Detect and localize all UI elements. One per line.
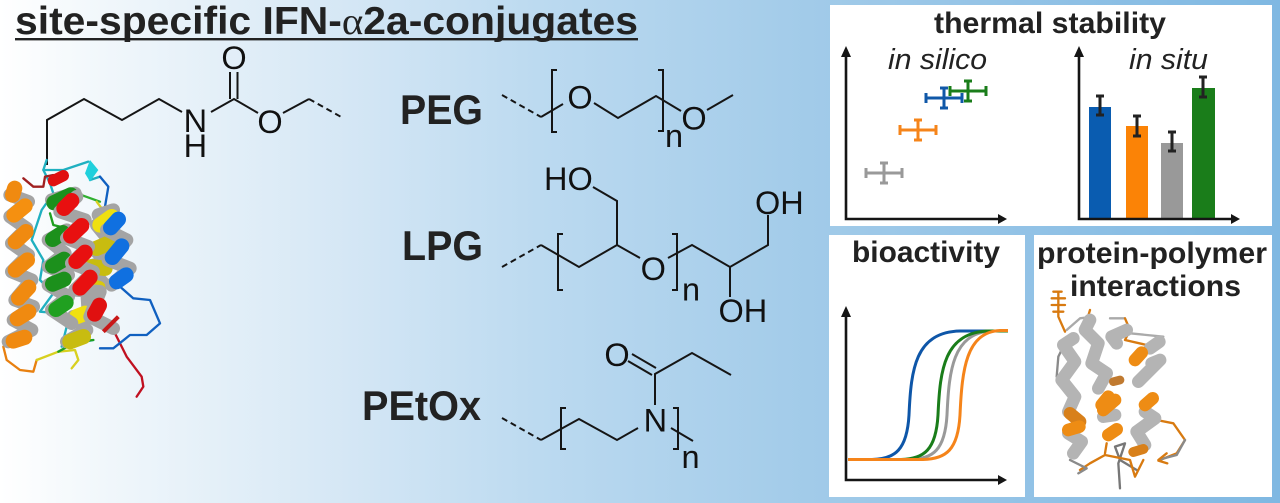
structure: LPG — [502, 161, 804, 329]
structure: LPG: OH — [718, 293, 767, 329]
label: PEtOx: PEtOx — [362, 382, 482, 429]
bar chart: in situ — [1074, 46, 1240, 224]
heading: protein-polymer interactions: protein-polymer — [1037, 237, 1268, 270]
title: site-specific IFN- α2a-conjugates — [15, 0, 638, 43]
heading: protein-polymer interactions — [1037, 237, 1268, 303]
structure: PEG: O — [681, 100, 707, 136]
label: LPG: LPG — [402, 222, 483, 269]
linker chemical structure: H — [184, 128, 207, 164]
protein ribbon: interaction sites — [1052, 292, 1185, 488]
structure: LPG: HO — [544, 161, 593, 197]
structure: PEtOx: n — [682, 439, 700, 475]
panel: bioactivity — [829, 235, 1025, 497]
structure: LPG: n — [682, 272, 700, 308]
heading: bioactivity: bioactivity — [852, 236, 1001, 269]
structure: LPG: OH — [755, 185, 804, 221]
structure: LPG: O — [641, 251, 666, 287]
protein ribbon: IFN-alpha2a — [3, 160, 160, 397]
structure: PEtOx: N — [644, 402, 667, 438]
linker chemical structure — [47, 40, 343, 165]
structure: PEtOx: O — [604, 337, 630, 373]
green helix — [48, 193, 75, 323]
subheading: in situ: in situ — [1129, 44, 1208, 76]
linker chemical structure: N — [184, 103, 207, 139]
subheading: in silico: in silico — [888, 44, 987, 76]
structure: PEtOx — [502, 337, 731, 475]
panel: thermal stability — [830, 5, 1272, 226]
blue helix — [107, 219, 130, 285]
heading: protein-polymer interactions: interactions — [1070, 270, 1241, 303]
structure: PEG — [502, 70, 733, 154]
orange helix — [8, 188, 33, 342]
yellow helix — [67, 210, 113, 342]
linker chemical structure: O — [257, 104, 283, 140]
heading: thermal stability: thermal stability — [934, 7, 1167, 40]
linker chemical structure: O — [221, 40, 247, 76]
structure: PEG: n — [665, 118, 683, 154]
dose-response chart — [841, 306, 1008, 485]
structure: PEG: O — [567, 80, 593, 116]
red helix — [53, 176, 118, 332]
panel: protein-polymer interactions — [1034, 235, 1272, 497]
scatter chart: in silico — [841, 46, 1007, 224]
label: PEG: PEG — [400, 86, 483, 133]
